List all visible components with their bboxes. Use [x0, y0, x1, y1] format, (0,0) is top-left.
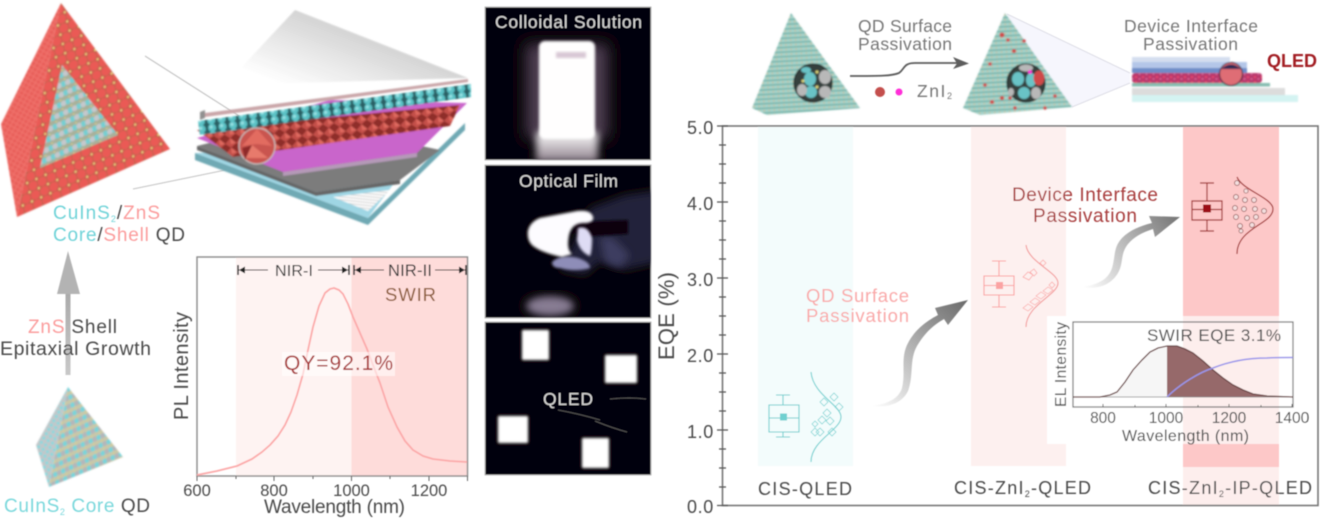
label: QLED: QLED: [1267, 51, 1317, 71]
box plot: CIS-ZnI2-IP-QLED: [1192, 177, 1273, 254]
band: CIS-QLED: [758, 127, 853, 466]
label: core QD: CuInS: [4, 496, 59, 517]
x tick labels: 1000: [333, 482, 370, 500]
label: device interface passivation annotation: Passivation: [1033, 206, 1137, 227]
category labels: CIS-ZnI: [954, 478, 1024, 498]
x axis ticks: [197, 476, 468, 481]
photo: colloidal solution: Colloidal Solution: [495, 12, 642, 32]
inset tick labels: 1000: [1149, 410, 1184, 427]
EL curve: [1073, 346, 1293, 397]
range arrows NIR-I and NIR-II: [238, 265, 466, 275]
photo: colloidal solution: [485, 7, 651, 162]
inset ticks: [1103, 404, 1292, 407]
category labels: [758, 478, 1312, 499]
category labels: 2: [1025, 489, 1030, 499]
label: device interface passivation: Device Interface: [1124, 16, 1258, 36]
inset tick labels: 1200: [1212, 410, 1247, 427]
inset tick labels: [1090, 410, 1310, 427]
y axis title: EQE (%): [654, 272, 679, 360]
shaded SWIR area: [1167, 346, 1293, 397]
label: core/shell QD: [53, 203, 185, 246]
label: core QD: 2: [60, 507, 65, 517]
label: ZnS shell epitaxial growth: ZnS Shell: [28, 317, 117, 338]
y tick labels: [687, 118, 714, 517]
inset x title: Wavelength (nm): [1122, 428, 1249, 445]
label: ZnS shell epitaxial growth: Epitaxial Growth: [0, 338, 151, 360]
y axis title: PL Intensity: [171, 312, 193, 420]
category labels: CIS-ZnI: [1148, 478, 1218, 498]
label: core QD: Core: [65, 496, 120, 517]
y ticks: [717, 126, 728, 506]
zoom guide to device interface: [1007, 14, 1130, 107]
x tick labels: 800: [260, 482, 288, 500]
category labels: CIS-QLED: [758, 479, 852, 499]
label: device interface passivation: Passivation: [1143, 34, 1238, 54]
chart: PL spectrum: NIR-I: [275, 263, 313, 280]
label: QD surface passivation annotation: QD Surface: [806, 285, 909, 306]
label: core/shell QD: ZnS: [123, 203, 160, 224]
x axis title: Wavelength (nm): [264, 497, 405, 518]
label: QD surface passivation: Passivation: [858, 34, 952, 54]
x tick labels: [183, 482, 447, 500]
zoom guide lines from quantum dot to device: [133, 56, 258, 189]
label: core/shell QD: 2: [111, 214, 116, 224]
label: ZnS shell epitaxial growth: [0, 317, 151, 360]
label: device interface passivation annotation: [1012, 185, 1158, 227]
band: CIS-ZnI2-IP-QLED: [1183, 127, 1279, 505]
legend: ZnI2 ions: 2: [947, 91, 952, 101]
arrow: device interface passivation gain: [1082, 216, 1180, 288]
extraction curve: [1167, 358, 1293, 397]
box plot: CIS-ZnI2-QLED: [984, 245, 1058, 327]
photo: QLED devices: [485, 322, 651, 475]
label: QD surface passivation: QD Surface: [858, 16, 952, 36]
illustration: small CuInS2 core tetrahedron: [36, 387, 123, 487]
magnifier on quantum dot layer: [239, 128, 275, 164]
y tick labels: 0.0: [687, 497, 714, 517]
label: core/shell QD: CuInS: [53, 203, 110, 224]
inset tick labels: 800: [1090, 410, 1116, 427]
illustration: pristine QD with zoom circle: [752, 13, 860, 115]
label: QD surface passivation: [858, 16, 952, 54]
inset y title: EL Intensity: [1053, 322, 1070, 407]
arrow: QD surface passivation gain: [870, 300, 968, 407]
legend: ZnI2 ions: ZnI: [917, 81, 945, 101]
label: QD surface passivation annotation: Passivation: [806, 305, 909, 326]
photo: optical film: [485, 165, 660, 318]
illustration: QLED device layer stack: [195, 10, 471, 225]
chart: PL spectrum: NIR-II: [388, 262, 432, 280]
legend: ZnI2 ions: [875, 81, 952, 101]
y tick labels: 3.0: [687, 270, 714, 290]
chart: PL spectrum: [171, 257, 468, 518]
illustration: passivated QD with zoom circle: [963, 13, 1072, 115]
SWIR label: SWIR: [385, 284, 436, 305]
x tick labels: 600: [183, 482, 211, 500]
y tick labels: 2.0: [687, 346, 714, 366]
label: core/shell QD: Core/Shell QD: [53, 225, 185, 246]
illustration: device interface stack: [1132, 57, 1298, 102]
category labels: -IP-QLED: [1225, 478, 1312, 498]
quantum yield label: QY=92.1%: [284, 352, 393, 375]
photo: optical film: Optical Film: [519, 171, 618, 191]
chart: EQE box plots: [654, 118, 1318, 517]
label: QD surface passivation annotation: [806, 285, 909, 326]
y tick labels: 4.0: [687, 194, 714, 214]
y tick labels: 1.0: [687, 422, 714, 442]
label: core/shell QD: /: [117, 203, 123, 224]
axes frame: [722, 126, 1318, 506]
arrow: shell growth: [57, 251, 80, 375]
PL curve: [197, 288, 467, 475]
label: core QD: QD: [121, 496, 150, 517]
band: CIS-ZnI2-QLED: [971, 127, 1066, 466]
arrow: QD surface passivation step: [850, 57, 969, 76]
label: device interface passivation annotation: Device Interface: [1012, 185, 1158, 206]
x tick labels: 1200: [411, 482, 447, 500]
inset tick labels: 1400: [1275, 410, 1310, 427]
label: device interface passivation: [1124, 16, 1258, 54]
box plot: CIS-QLED: [769, 372, 843, 462]
illustration: large CuInS2/ZnS core/shell tetrahedron: [1, 3, 170, 217]
y tick labels: 5.0: [687, 118, 714, 138]
inset chart: EL spectrum: [1053, 322, 1310, 445]
inset title: SWIR EQE 3.1%: [1147, 326, 1281, 345]
category labels: 2: [1219, 489, 1224, 499]
category labels: -QLED: [1031, 478, 1091, 498]
photo: QLED devices: QLED: [543, 389, 593, 409]
